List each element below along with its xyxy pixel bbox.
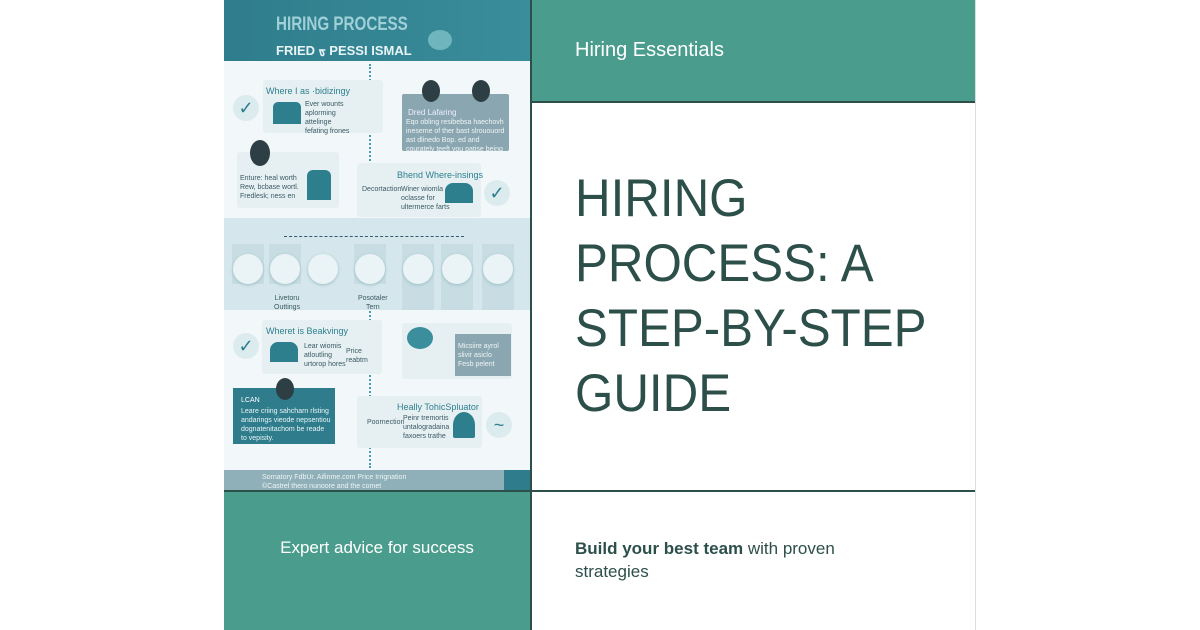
band of steps: Outtings [274, 304, 300, 311]
step 5 [357, 396, 482, 448]
right border [975, 0, 976, 630]
step 3: ultermerce farts [401, 204, 450, 211]
title: GUIDE [575, 364, 731, 423]
card right top: ast dlinedo Bop. ed and [406, 137, 480, 144]
panel: infographic image [224, 0, 530, 490]
step 5: untalogradaina [403, 424, 449, 431]
step 3: Winer wiomla [401, 186, 443, 193]
image footer: Sornatory FdbUr. Aifinme.com Price Irrignation [262, 474, 406, 481]
step 5: Poornection [367, 419, 404, 426]
panel: infographic image: ~ [494, 415, 504, 435]
title: HIRING [575, 169, 748, 228]
image header: FRIED ᢐ PESSI ISMAL [276, 43, 412, 58]
step 4 [262, 320, 382, 374]
card right top: Eqo obling resibebsa haechovh [406, 119, 504, 126]
dark teal card: LCAN [241, 397, 260, 404]
band of steps [224, 218, 530, 310]
step 4: urtorop hores [304, 361, 346, 368]
subtitle text: Build your best team with proven strategies [575, 539, 835, 581]
step 1: Ever wounts [305, 101, 344, 108]
step 4: Price reabtm [346, 348, 368, 364]
panel: infographic image: ✓ [238, 336, 254, 356]
step 4: Wheret is Beakvingy [266, 326, 348, 336]
dark teal card: Leare criing sahcharn rlsting [241, 408, 329, 415]
panel: infographic image: Fesb pelent [458, 361, 495, 368]
image header: HIRING PROCESS [276, 14, 408, 35]
title: PROCESS: A [575, 234, 874, 293]
panel: infographic image: Micsiire ayrol [458, 343, 499, 350]
divider line vertical [530, 0, 532, 630]
timeline [369, 64, 371, 468]
step 5: faxoers trathe [403, 433, 446, 440]
dark teal card: to vepisity. [241, 435, 274, 442]
dark teal card [233, 388, 335, 444]
band of steps: Posotaler [358, 295, 388, 302]
card right top: Dred Lafaring [408, 108, 456, 117]
step 5: Heally TohicSpluator [397, 402, 479, 412]
horizontal divider [532, 490, 975, 492]
panel: top bar [532, 0, 975, 103]
label: Hiring Essentials: Hiring Essentials [575, 39, 724, 61]
title [575, 169, 927, 423]
image footer [224, 470, 530, 490]
step 1: attelinge [305, 119, 331, 126]
card right top: ineseme of ther bast slrououord [406, 128, 504, 135]
card right mid [402, 323, 512, 379]
step 1: Where I as ·bidizingy [266, 86, 350, 96]
step 4: Lear wiomis [304, 343, 341, 350]
step 3: Bhend Where-insings [397, 170, 483, 180]
step 4: atloutling [304, 352, 332, 359]
step 2: Enture: heal worth [240, 175, 297, 182]
panel: infographic image: ✓ [489, 183, 505, 203]
step 3: oclasse for [401, 195, 435, 202]
step 1 [263, 80, 383, 133]
step 2 [237, 152, 339, 208]
step 1: fefating frones [305, 128, 349, 135]
image header [224, 0, 530, 61]
tagline: Expert advice for success [280, 538, 474, 557]
panel: bottom left teal [224, 490, 530, 630]
title: STEP-BY-STEP [575, 299, 927, 358]
step 1: aplorming [305, 110, 336, 117]
panel: infographic image: slivir asiclo [458, 352, 492, 359]
dark teal card: dognatenitachom be reade [241, 426, 324, 433]
step 2: Fredlesk; ness en [240, 193, 295, 200]
step 2: Rew, bcbase wortl. [240, 184, 299, 191]
panel: infographic image: ✓ [238, 98, 254, 118]
card right top [402, 94, 509, 151]
band of steps: Tern [366, 304, 380, 311]
dark teal card: andarings vieode nepsentiou [241, 417, 331, 424]
step 5: Peinr tremortis [403, 415, 449, 422]
step 3: Decortaction [362, 186, 401, 193]
band of steps: Livetoru [275, 295, 299, 302]
image footer: ©Castrel thero nunoore and the comet [262, 483, 381, 490]
step 3 [357, 163, 481, 217]
